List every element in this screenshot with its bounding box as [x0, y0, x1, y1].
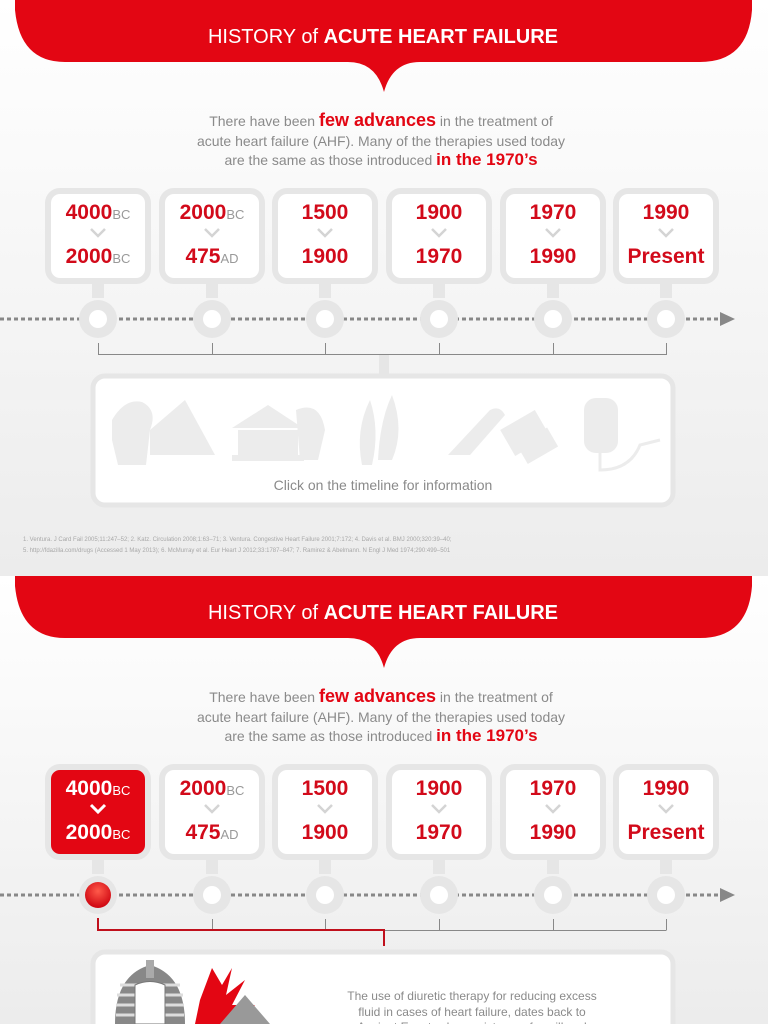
timeline page 1 [0, 191, 735, 375]
references [23, 537, 452, 554]
intro text page 2: There have been few advances in the treatment of [209, 686, 553, 706]
title: HISTORY of ACUTE HEART FAILURE [208, 26, 558, 48]
intro text page 1: There have been few advances in the treatment of [209, 110, 553, 130]
intro text page 1: acute heart failure (AHF). Many of the therapies used today [197, 133, 565, 149]
prompt text: Click on the timeline for information [274, 477, 492, 493]
period boxes: 1970 [530, 201, 576, 224]
period boxes (first active): 1990 [643, 777, 689, 800]
intro text page 2: acute heart failure (AHF). Many of the therapies used today [197, 709, 565, 725]
intro text page 2: are the same as those introduced in the 1970’s [224, 726, 538, 745]
icon: pharaoh and pyramid [115, 960, 270, 1024]
dotted line [0, 888, 735, 902]
period boxes: 2000BC [180, 201, 244, 224]
title page 2: HISTORY of ACUTE HEART FAILURE [208, 602, 558, 624]
period boxes: 475AD [185, 245, 239, 268]
intro text page 1 [197, 110, 565, 169]
period boxes: Present [627, 245, 705, 268]
period boxes: 1990 [530, 245, 576, 268]
period boxes: 2000BC [66, 245, 130, 268]
period boxes (first active): 1500 [302, 777, 348, 800]
period boxes [48, 191, 716, 298]
description text: fluid in cases of heart failure, dates back to [358, 1005, 586, 1019]
period boxes (first active): 4000BC [66, 777, 130, 800]
bracket [98, 343, 666, 375]
references: 5. http://fdazilla.com/drugs (Accessed 1 May 2013); 6. McMurray et al. Eur Heart J 2012;33:1787–847; 7. Ramirez & Abelmann. N Engl J Med 1974;290:499–501 [23, 548, 451, 554]
bracket page 2 [98, 918, 666, 946]
period boxes (first active): 1990 [530, 821, 576, 844]
period boxes: 1900 [302, 245, 348, 268]
description text: The use of diuretic therapy for reducing excess [347, 989, 597, 1003]
header banner page 1 [15, 0, 752, 92]
info panel page 2 [93, 952, 673, 1024]
period boxes (first active): Present [627, 821, 705, 844]
period boxes (first active): 2000BC [180, 777, 244, 800]
timeline nodes page 2 [79, 876, 685, 914]
period boxes: 1990 [643, 201, 689, 224]
period boxes (first active): 1900 [302, 821, 348, 844]
period boxes (first active): 1970 [416, 821, 462, 844]
references: 1. Ventura. J Card Fail 2005;11:247–52; 2. Katz. Circulation 2008;1:63–71; 3. Ventura. Congestive Heart Failure 2001;7:172; 4. Davis et al. BMJ 2000;320:39–40; [23, 537, 452, 543]
timeline nodes [79, 300, 685, 338]
period boxes (first active): 1900 [416, 777, 462, 800]
timeline page 2 [0, 767, 735, 946]
intro text page 2 [197, 686, 565, 745]
icons: faded history images [112, 395, 660, 470]
period boxes: 1500 [302, 201, 348, 224]
period boxes: 1900 [416, 201, 462, 224]
period boxes (first active) [48, 767, 716, 874]
intro text page 1: are the same as those introduced in the 1970’s [224, 150, 538, 169]
header banner page 2 [15, 576, 752, 668]
period boxes (first active): 475AD [185, 821, 239, 844]
period boxes (first active): 2000BC [66, 821, 130, 844]
period boxes: 4000BC [66, 201, 130, 224]
period boxes: 1970 [416, 245, 462, 268]
dotted line [0, 312, 735, 326]
description text [347, 989, 597, 1024]
period boxes (first active): 1970 [530, 777, 576, 800]
info panel page 1 [93, 376, 673, 505]
